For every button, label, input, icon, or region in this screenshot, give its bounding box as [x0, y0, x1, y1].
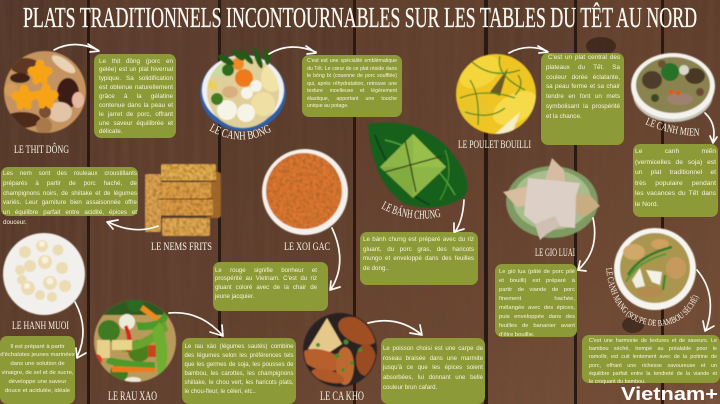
arrow: thit dong: [54, 44, 99, 52]
panel: banh chung: Le bánh chưng est préparé avec du riz: [363, 236, 474, 243]
panel: gio lua: [495, 264, 577, 337]
panel: thit dong: [94, 54, 176, 138]
panel: canh bong: texture moelleuse et légèrement: [307, 88, 397, 94]
label: le poulet bouilli: LE POULET BOUILLI: [458, 137, 531, 151]
panel: thit dong: délicate.: [99, 128, 122, 135]
arrow: poulet: [509, 46, 548, 53]
panel: canh mien: (vermicelles de soja) est: [635, 158, 716, 166]
panel: ca kho: [381, 338, 485, 404]
panel: poulet bouilli: sa peau ferme et sa chair: [546, 83, 620, 90]
panel: thit dong: une saveur équilibrée et: [99, 120, 173, 126]
panel: gio lua: mélangée avec des épices,: [499, 304, 575, 310]
panel: hanh muoi: Il est préparé à partir: [10, 344, 65, 350]
panel: canh mang: ramollir, est cuit lentement avec de la poitrine de: [589, 354, 717, 360]
panel: banh chung: mungo et enveloppé dans des feuilles: [363, 255, 474, 262]
panel: canh bong: élastique, apportant une touche: [307, 96, 397, 102]
arrow: gio lua: [578, 218, 595, 271]
panel: thit dong: contenue dans la peau et: [99, 102, 173, 109]
food: ca kho: [302, 312, 378, 388]
food: canh mien: [631, 53, 715, 122]
panel: hanh muoi: [0, 336, 75, 404]
arrow: rau xao: [169, 313, 223, 336]
panel: thit dong: Le thịt đông (porc en: [99, 58, 173, 65]
panel: canh bong: le bóng bì (couenne de porc soufflée): [307, 73, 397, 79]
panel: rau xao: le chou-fleur, le céleri, etc..: [184, 388, 256, 394]
panel: gio lua: feuilles de bananier avant: [499, 322, 575, 328]
panel: gio lua: finement hachée,: [499, 296, 575, 302]
text: douceur.: [3, 219, 27, 226]
label: le hanh muoi: LE HANH MUOI: [12, 318, 69, 332]
panel: canh mien: [633, 144, 718, 217]
food: poulet bouilli: [455, 53, 537, 135]
panel: nems frits: un équilibre parfait entre acidité, épices et: [3, 209, 137, 216]
panel: ca kho: roseau braisée dans une marmite: [383, 355, 483, 362]
panel: rau xao: [182, 338, 296, 404]
panel: hanh muoi: douce et acidulée, idéale: [5, 388, 70, 394]
panel: canh bong: [302, 55, 402, 117]
panel: rau xao: des légumes selon les préférences tels: [184, 352, 294, 358]
panel: ca kho: absorbées, lui donnant une belle: [383, 374, 483, 381]
panel: canh mien: un plat traditionnel et: [635, 169, 716, 176]
label: le xoi gac: LE XOI GAC: [284, 239, 330, 253]
panel: thit dong: gelée) est un plat hivernal: [99, 66, 173, 73]
panel: canh bong: du Tết. Le cœur de ce plat réside dans: [307, 66, 397, 72]
panel: thit dong: le jarret de porc, offrant: [99, 111, 173, 118]
panel: poulet bouilli: plateaux du Tết. Sa: [546, 64, 620, 71]
panel: canh mien: les vacances du Tết dans: [635, 190, 716, 197]
label: le canh mang: LE CANH MANG (SOUPE DE BAMBOU SÉCHÉ): [606, 268, 700, 326]
panel: canh mien: Le canh miến: [635, 148, 716, 155]
label: le banh chung: LE BÁNH CHUNG: [381, 201, 440, 219]
panel: xoi gac: jeune jacquier.: [215, 293, 254, 300]
panel: poulet bouilli: [541, 53, 624, 145]
panel: nems frits: Les nem sont des rouleaux croustillants: [3, 170, 137, 177]
arrow: ca kho: [368, 321, 422, 335]
label: le canh bong: LE CANH BONG: [209, 123, 271, 140]
arrow: nems: [107, 220, 158, 230]
arrow: canh bong: [269, 46, 316, 54]
panel: canh mang: C'est une harmonie de textures et de saveurs. Le: [589, 338, 717, 344]
panel: rau xao: shiitake, le chou vert, les haricots plats,: [184, 380, 294, 386]
panel: poulet bouilli: couleur dorée éclatante,: [546, 74, 620, 80]
label: le rau xao: LE RAU XAO: [108, 388, 157, 403]
panel: gio lua: partir de viande de porc: [499, 286, 575, 292]
panel: nems frits: variés. Leur garniture bien assaisonnée offre: [3, 199, 137, 206]
logo: Vietnam+: Vietnam+: [621, 384, 718, 404]
panel: poulet bouilli: tendre en font un mets: [546, 93, 620, 100]
panel: xoi gac: [213, 262, 328, 311]
panel: gio lua: d'être bouillie.: [499, 332, 535, 338]
panel: canh mang: [582, 335, 720, 383]
panel: hanh muoi: d'échalotes jeunes marinées: [0, 352, 75, 358]
panel: nems frits: champignons noirs, de shiitake et de légumes: [3, 190, 137, 197]
panel: nems frits: préparés à partir de porc haché, de: [3, 180, 137, 187]
panel: thit dong: typique. Sa solidification: [99, 75, 173, 82]
panel: canh bong: C'est est une spécialité emblématique: [307, 58, 397, 64]
arrow: canh mang: [697, 270, 714, 331]
food: hanh muoi: [3, 233, 85, 315]
food: banh chung: [368, 122, 467, 208]
arrow: canh mien: [705, 113, 717, 143]
panel: poulet bouilli: C'est un plat central des: [548, 54, 620, 61]
panel: canh mang: équilibre parfait entre la tendreté de la viande et: [589, 371, 717, 377]
panel: gio lua: Le giò lụa (pâté de porc pilé: [499, 268, 575, 274]
panel: nems frits: [1, 167, 138, 216]
panel: canh mien: le Nord.: [635, 200, 658, 208]
panel: xoi gac: gluant coloré avec de la chair de: [215, 284, 317, 291]
panel: ca kho: Le poisson choisi est une carpe de: [383, 345, 483, 352]
panel: poulet bouilli: symbolisant la prospérité: [546, 103, 620, 110]
panel: canh mien: très populaire pendant: [635, 180, 716, 186]
panel: banh chung: gluant, du porc gras, des haricots: [363, 246, 474, 253]
panel: xoi gac: prospérité au Vietnam. C'est du riz: [215, 275, 317, 282]
food: rau xao: [90, 296, 176, 383]
food: canh mang: [614, 228, 696, 310]
panel: poulet bouilli: et la chance.: [546, 112, 582, 120]
panel: rau xao: que les germes de soja, les pousses de: [184, 362, 294, 368]
label: le nems frits: LE NEMS FRITS: [151, 239, 212, 253]
panel: canh mang: le croquant du bambou.: [589, 379, 646, 385]
food: canh bong: [200, 47, 286, 131]
panel: rau xao: bambou, les carottes, les champignons: [184, 370, 294, 376]
panel: banh chung: de dong..: [363, 265, 389, 272]
panel: thit dong: est obtenue naturellement: [99, 84, 173, 91]
food: xoi gac: [262, 149, 348, 235]
panel: hanh muoi: dans une solution de: [10, 361, 65, 367]
panel: canh bong: unique au potage.: [307, 103, 349, 109]
panel: thit dong: grâce à la gélatine: [99, 93, 173, 100]
panel: hanh muoi: vinaigre, de sel et de sucre,: [1, 370, 74, 376]
food: gio lua: [503, 158, 600, 240]
panel: gio lua: et bouilli) est préparé à: [499, 278, 575, 284]
panel: canh mang: porc, offrant une richesse savoureuse et un: [589, 362, 717, 368]
food: nems frits: [145, 164, 221, 236]
label: le ca kho: LE CA KHO: [320, 388, 364, 403]
panel: canh mang: bambou séché, trempé au préalable pour le: [589, 346, 717, 352]
label: le canh mien: LE CANH MIEN: [645, 118, 700, 136]
panel: xoi gac: Le rouge signifie bonheur et: [215, 266, 317, 274]
arrow: xoi gac: [330, 228, 340, 290]
panel: gio lua: puis enveloppée dans des: [499, 314, 575, 320]
label: le thit dong: LE THIT DÔNG: [14, 142, 69, 156]
arrow: hanh muoi: [75, 302, 86, 358]
panel: rau xao: Le rau xào (légumes sautés) combine: [184, 344, 294, 350]
panel: ca kho: jusqu'à ce que les épices soient: [383, 364, 483, 371]
panel: banh chung: [360, 232, 478, 285]
panel: ca kho: couleur brun cafard.: [383, 384, 437, 391]
panel: hanh muoi: développe une saveur: [9, 379, 66, 385]
panel: canh bong: qui, après réhydratation, retrouve une: [307, 81, 397, 87]
food: thit dong: [3, 51, 87, 134]
arrow: banh chung: [454, 200, 464, 232]
label: le gio luai: LE GIO LUAI: [535, 245, 575, 259]
